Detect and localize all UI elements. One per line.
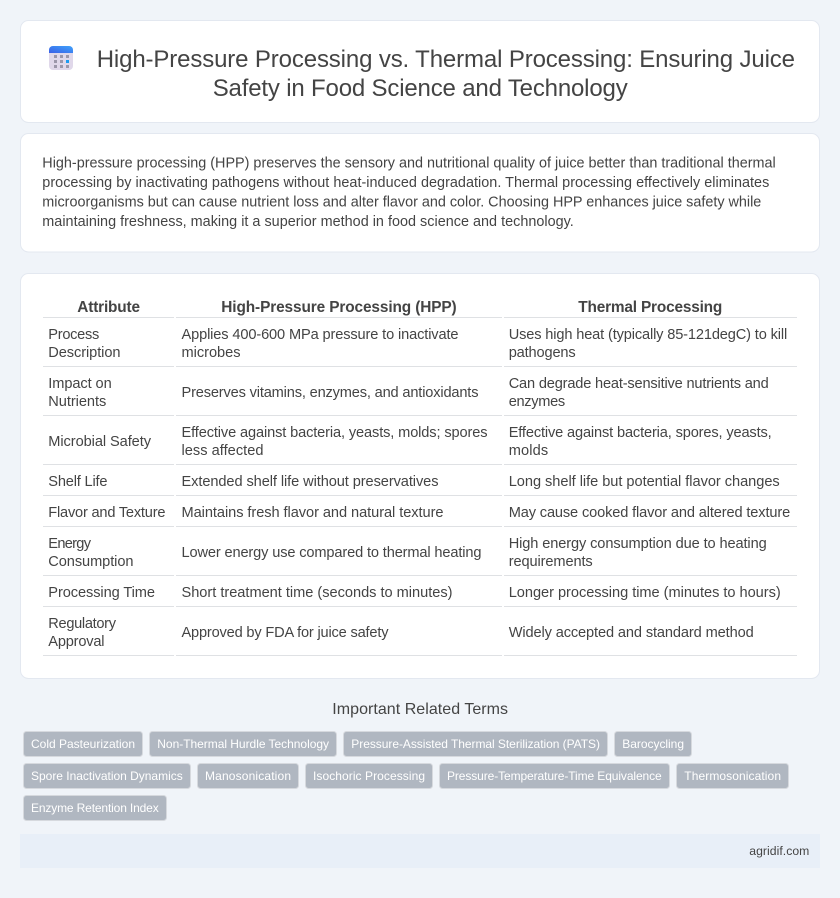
row: energy consumption: Consumption [48,554,133,570]
row: impact on nutrients: Nutrients [48,394,106,410]
row: impact on nutrients: Can degrade heat-sensitive nutrients and [509,376,769,392]
chip: cold pasteurization [24,732,142,756]
row: microbial safety: Effective against bacteria, spores, yeasts, [509,425,772,441]
table header row [77,299,722,316]
row: energy consumption: Energy [48,536,92,552]
row: shelf life: Long shelf life but potential flavor changes [509,474,780,490]
text block: summary paragraph: processing by inactivating pathogens without heat-induced degradation. Thermal processing effectively eliminates [42,175,769,191]
row: energy consumption: requirements [509,554,593,570]
row: microbial safety: Microbial Safety [48,434,152,450]
row: flavor and texture: May cause cooked flavor and altered texture [509,505,790,521]
row: shelf life: Extended shelf life without preservatives [182,474,438,490]
text block: summary paragraph: microorganisms but can cause nutrient loss and alter flavor and color. Choosing HPP enhances juice safety while [42,194,761,210]
row: microbial safety: molds [509,443,548,459]
row: processing time: Short treatment time (seconds to minutes) [182,585,452,601]
icon: calendar [49,46,73,70]
row: shelf life: Shelf Life [48,474,108,490]
row: process description [48,327,787,361]
row: microbial safety [48,425,772,459]
row: regulatory approval: Widely accepted and standard method [509,625,754,641]
chip: pressure-temperature-time equivalence: Pressure-Temperature-Time Equivalence [447,769,662,783]
row: impact on nutrients: Preserves vitamins, enzymes, and antioxidants [182,385,478,401]
chip: spore inactivation dynamics [24,764,190,788]
chip: enzyme retention index: Enzyme Retention Index [31,801,159,815]
chip: thermosonication: Thermosonication [684,769,781,783]
row: flavor and texture: Flavor and Texture [48,505,165,521]
row: process description: Process [48,327,99,343]
chip: pressure-temperature-time equivalence [440,764,670,788]
row: regulatory approval: Regulatory [48,616,117,632]
panel: header [20,20,820,122]
row: process description: Applies 400-600 MPa pressure to inactivate [182,327,458,343]
row: processing time: Longer processing time (minutes to hours) [509,585,781,601]
title [97,46,795,102]
chip: manosonication: Manosonication [205,769,291,783]
row: flavor and texture [48,505,790,521]
chip: barocycling: Barocycling [622,737,684,751]
chip: spore inactivation dynamics: Spore Inactivation Dynamics [31,769,183,783]
row: microbial safety: less affected [182,443,264,459]
chip: thermosonication [676,764,788,788]
chip: non-thermal hurdle technology: Non-Thermal Hurdle Technology [157,737,329,751]
chip: barocycling [614,732,692,756]
table header row: Thermal Processing [578,299,722,316]
row: impact on nutrients [48,376,769,410]
row: energy consumption: High energy consumption due to heating [509,536,767,552]
text block: summary paragraph: High-pressure processing (HPP) preserves the sensory and nutritional quality of juice better than traditional thermal [42,156,776,172]
panel: introduction [20,134,820,252]
text block: summary paragraph [42,156,776,230]
footer: agridif.com [749,844,809,858]
chip: PATS: Pressure-Assisted Thermal Sterilization (PATS) [351,737,600,751]
chip: isochoric processing: Isochoric Processing [313,769,425,783]
panel: comparison table [20,274,820,678]
row: flavor and texture: Maintains fresh flavor and natural texture [182,505,444,521]
row: process description: pathogens [509,345,576,361]
text block: summary paragraph: maintaining freshness, making it a superior method in food science and technology. [42,214,574,230]
chip: non-thermal hurdle technology [150,732,336,756]
chip: manosonication [198,764,298,788]
footer [20,834,820,868]
title: High-Pressure Processing vs. Thermal Processing: Ensuring Juice [97,46,795,73]
row: shelf life [48,474,780,490]
chip: isochoric processing [306,764,432,788]
row: processing time [48,585,781,601]
title: Safety in Food Science and Technology [213,75,628,102]
row: regulatory approval: Approval [48,634,104,650]
row: processing time: Processing Time [48,585,155,601]
row: microbial safety: Effective against bacteria, yeasts, molds; spores [182,425,488,441]
heading: important related terms: Important Related Terms [332,701,508,718]
chip: cold pasteurization: Cold Pasteurization [31,737,135,751]
table header row: High-Pressure Processing (HPP) [221,299,457,316]
row: regulatory approval [48,616,754,650]
row: energy consumption [48,536,767,570]
related term chips [24,732,788,820]
row: process description: Uses high heat (typically 85-121degC) to kill [509,327,787,343]
row: process description: Description [48,345,120,361]
chip: PATS [344,732,608,756]
row: impact on nutrients: enzymes [509,394,565,410]
row: impact on nutrients: Impact on [48,376,112,392]
row: regulatory approval: Approved by FDA for juice safety [182,625,389,641]
row: process description: microbes [182,345,240,361]
table header row: Attribute [77,299,140,316]
chip: enzyme retention index [24,796,166,820]
row: energy consumption: Lower energy use compared to thermal heating [182,545,482,561]
